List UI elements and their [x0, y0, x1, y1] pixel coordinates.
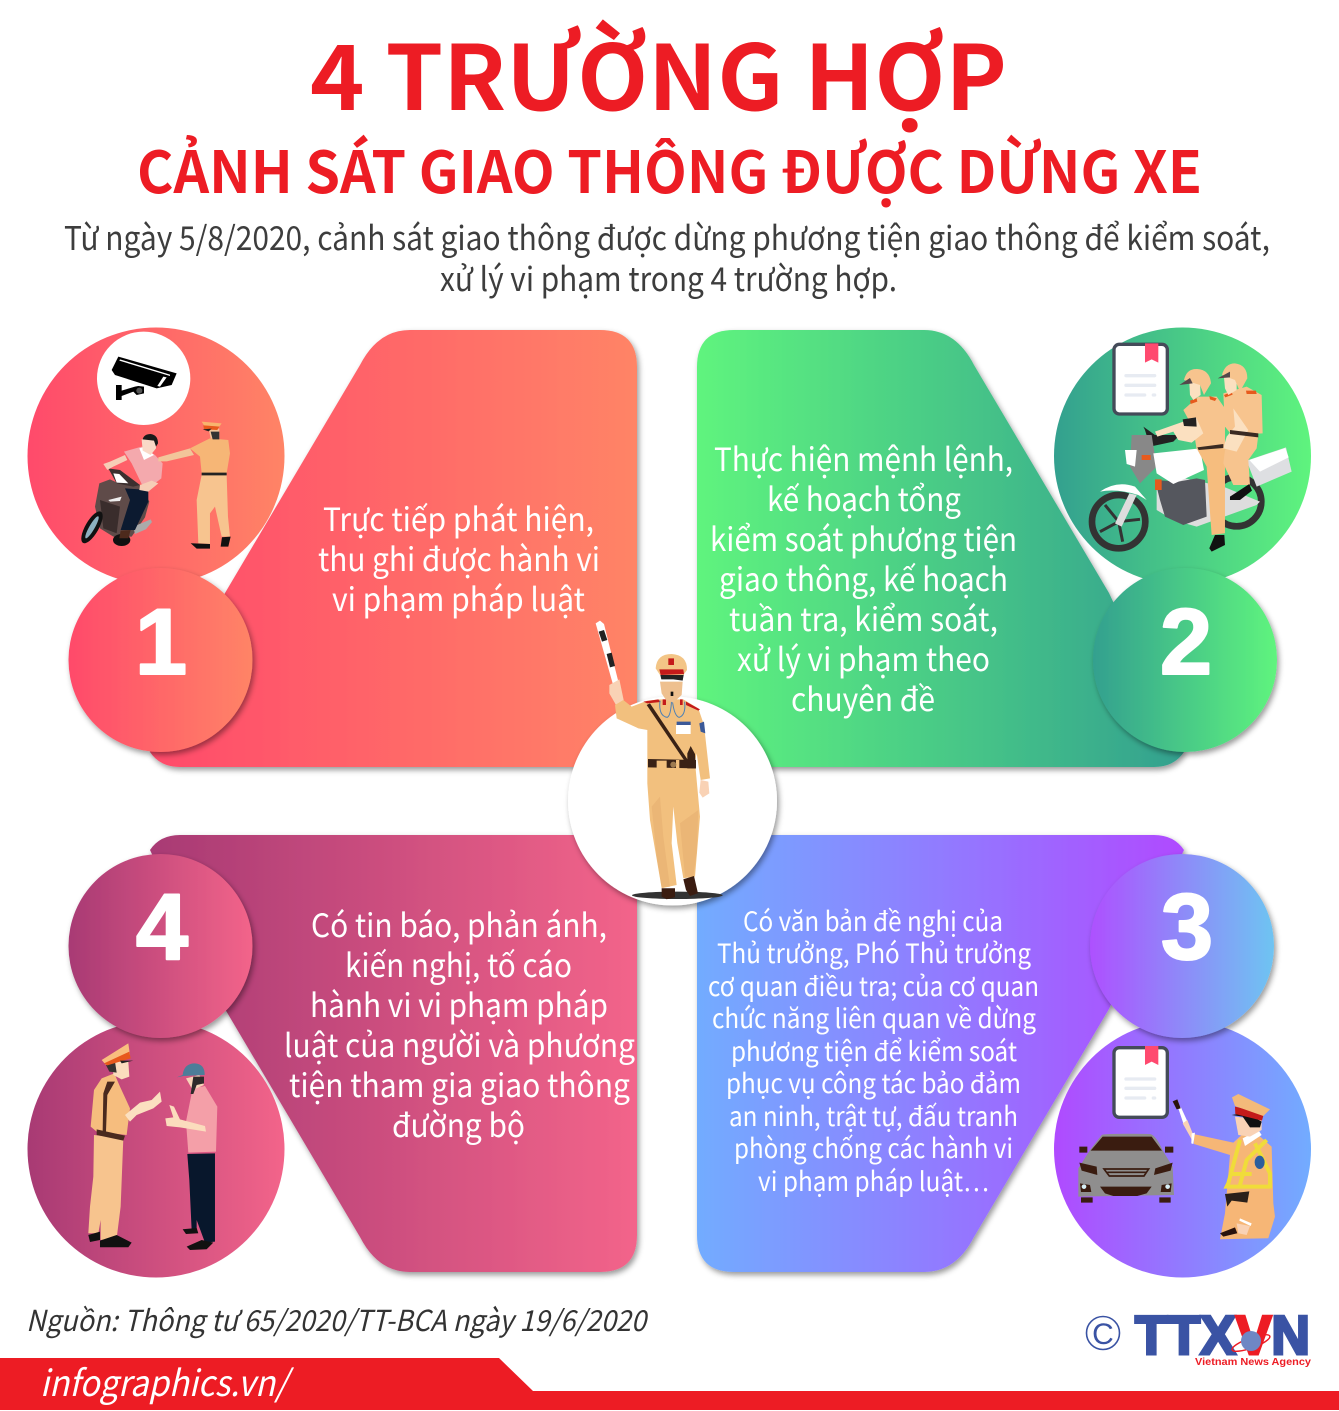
- number badge 2: [1093, 568, 1277, 752]
- riders: [1155, 363, 1263, 552]
- number badge 2: 2: [1160, 589, 1212, 694]
- text: case 3: an ninh, trật tự, đấu tranh: [729, 1095, 1018, 1134]
- number badge 1: 1: [135, 589, 187, 694]
- text: case 3: phòng chống các hành vi: [734, 1127, 1013, 1166]
- icon: camera badge: [97, 332, 190, 425]
- number badge 3: [1090, 854, 1274, 1038]
- footer banner: [0, 1355, 1339, 1410]
- text: case 2: xử lý vi phạm theo: [737, 635, 990, 681]
- text: case 2: giao thông, kế hoạch: [719, 555, 1008, 601]
- text: case 2: [710, 435, 1017, 721]
- logo: TTXVN: C: [1092, 1318, 1114, 1351]
- text: case 3: Có văn bản đề nghị của: [743, 900, 1003, 939]
- text: case 2: chuyên đề: [791, 675, 935, 721]
- police officer: [158, 422, 231, 549]
- title: CẢNH SÁT GIAO THÔNG ĐƯỢC DỪNG XE: [137, 126, 1202, 210]
- illustration circle 2: [1054, 328, 1311, 584]
- text: case 4: đường bộ: [392, 1101, 525, 1147]
- number badge 4: [68, 854, 252, 1038]
- text: case 4: hành vi vi phạm pháp: [310, 981, 608, 1027]
- text: case 1: Trực tiếp phát hiện,: [323, 495, 594, 541]
- motorcycle: [1092, 418, 1292, 548]
- text: case 1: thu ghi được hành vi: [318, 535, 600, 581]
- text: case 2: tuần tra, kiểm soát,: [729, 595, 998, 641]
- text: case 3: [708, 900, 1039, 1199]
- text: case 3: Thủ trưởng, Phó Thủ trưởng: [717, 932, 1031, 971]
- text: case 3: cơ quan điều tra; của cơ quan: [708, 965, 1039, 1004]
- text: case 4: tiện tham gia giao thông: [289, 1061, 630, 1107]
- text: case 4: [284, 901, 635, 1147]
- car: [1078, 1134, 1174, 1203]
- text: case 3: phục vụ công tác bảo đảm: [726, 1062, 1021, 1101]
- text: case 1: vi phạm pháp luật: [332, 575, 585, 621]
- footer banner: infographics.vn/: [40, 1355, 294, 1407]
- illustration circle 3: [1054, 1020, 1311, 1278]
- illustration circle 4: [28, 1020, 284, 1278]
- text: case 2: kế hoạch tổng: [767, 475, 961, 521]
- title: [137, 6, 1202, 210]
- source note: Nguồn: Thông tư 65/2020/TT-BCA ngày 19/6/2020: [26, 1298, 649, 1340]
- logo: TTXVN: TTXVN: [1135, 1304, 1310, 1366]
- panel: case 2: [697, 330, 1184, 767]
- center traffic police officer: [596, 621, 723, 899]
- text: case 4: kiến nghị, tố cáo: [345, 941, 572, 987]
- citizen: [165, 1063, 217, 1250]
- title: 4 TRƯỜNG HỢP: [310, 6, 1007, 136]
- icon: document: [1114, 1046, 1167, 1117]
- text: case 4: luật của người và phương: [284, 1021, 635, 1067]
- motorcyclist: [77, 434, 163, 546]
- number badge 1: [68, 568, 252, 752]
- panel: case 1: [150, 330, 637, 767]
- text: case 2: Thực hiện mệnh lệnh,: [714, 435, 1013, 481]
- text: case 2: kiểm soát phương tiện: [710, 515, 1017, 561]
- officer: [88, 1043, 162, 1247]
- number badge 4: 4: [136, 874, 188, 979]
- text: case 1: [318, 495, 600, 621]
- text: case 3: vi phạm pháp luật…: [758, 1160, 989, 1199]
- officer with baton: [1173, 1094, 1275, 1239]
- text: case 4: Có tin báo, phản ánh,: [311, 901, 607, 947]
- center circle: [568, 696, 777, 906]
- text: case 3: chức năng liên quan về dừng: [712, 997, 1036, 1036]
- illustration circle 1: [28, 328, 284, 584]
- text: case 3: phương tiện để kiểm soát: [731, 1030, 1017, 1069]
- subtitle: [64, 212, 1270, 301]
- logo: TTXVN: Vietnam News Agency: [1195, 1356, 1311, 1368]
- panel: case 3: [697, 835, 1184, 1272]
- panel: case 4: [150, 835, 637, 1272]
- number badge 3: 3: [1161, 874, 1213, 979]
- subtitle: xử lý vi phạm trong 4 trường hợp.: [440, 253, 897, 301]
- icon: document: [1114, 343, 1167, 414]
